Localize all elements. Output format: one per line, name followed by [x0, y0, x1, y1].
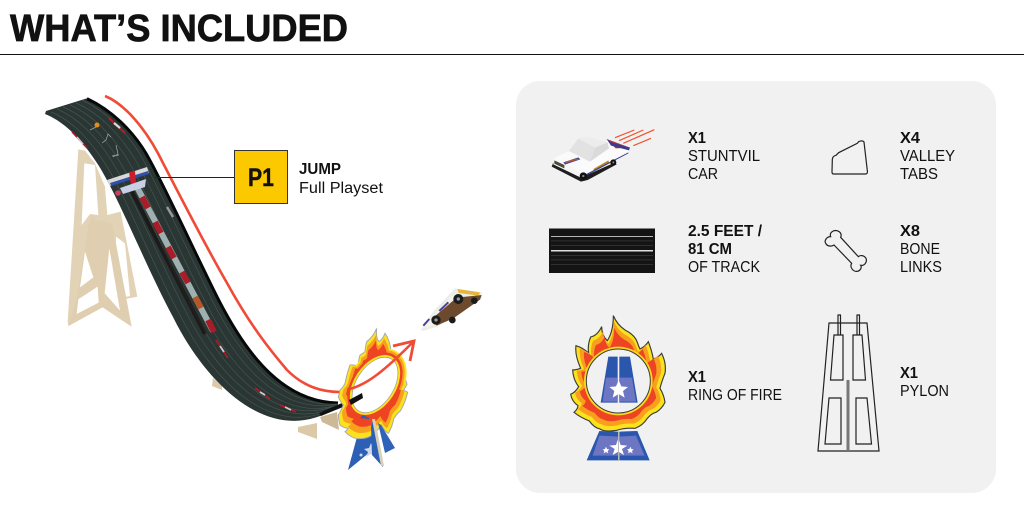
label: x1 ring of fire — [688, 369, 782, 404]
label: x4 valley tabs: TABS — [900, 166, 938, 183]
label: 2.5 feet of track — [688, 223, 763, 276]
label: x1 stuntvil car: CAR — [688, 166, 718, 183]
track decorations — [72, 118, 296, 412]
callout: P1 badge — [234, 150, 288, 204]
inner blue stand — [601, 357, 638, 403]
label: x1 stuntvil car — [688, 130, 760, 183]
icon: pylon outline — [818, 315, 879, 451]
lower blue base — [587, 431, 650, 461]
wooden pylon support — [68, 149, 137, 327]
callout connector line — [155, 177, 234, 178]
label: x8 bone links: BONE — [900, 241, 940, 258]
label: x4 valley tabs — [900, 130, 955, 183]
label: x8 bone links — [900, 223, 942, 276]
icon: track piece — [549, 228, 655, 273]
callout label: jump: JUMP — [299, 161, 341, 178]
icon: ring of fire — [571, 316, 665, 461]
icon: bone link — [825, 231, 866, 271]
label: x1 ring of fire: RING OF FIRE — [688, 387, 782, 404]
label: 2.5 feet of track: 2.5 FEET / — [688, 223, 763, 240]
label: x1 stuntvil car: X1 — [688, 130, 706, 147]
label: 2.5 feet of track: 81 CM — [688, 241, 732, 258]
title: WHAT’S INCLUDED — [10, 8, 348, 50]
icon: stuntvil car — [552, 130, 654, 182]
track end ramp — [319, 403, 343, 416]
callout label: jump: Full Playset — [299, 180, 384, 197]
callout: P1 badge: P1 — [248, 164, 274, 192]
label: x4 valley tabs: X4 — [900, 130, 920, 147]
label: x8 bone links: X8 — [900, 223, 920, 240]
label: x1 stuntvil car: STUNTVIL — [688, 148, 760, 165]
icon: blue stand front wing — [348, 415, 383, 470]
callout label: jump — [299, 161, 384, 197]
wooden valley tabs — [212, 378, 339, 439]
label: x1 pylon: PYLON — [900, 383, 949, 400]
label: x4 valley tabs: VALLEY — [900, 148, 955, 165]
icon: flame ring — [330, 328, 420, 439]
icon: flying car — [421, 288, 482, 331]
label: x1 pylon: X1 — [900, 365, 918, 382]
label: 2.5 feet of track: OF TRACK — [688, 259, 760, 276]
label: x1 ring of fire: X1 — [688, 369, 706, 386]
illustration: jump playset — [45, 96, 482, 470]
label: x1 pylon — [900, 365, 949, 400]
panel: included items — [516, 81, 996, 493]
flame ring — [571, 316, 665, 431]
icon: valley tab — [832, 141, 867, 174]
trajectory arc: red line — [105, 96, 345, 392]
ring-side ramp and arc passing through — [349, 341, 414, 419]
label: x8 bone links: LINKS — [900, 259, 942, 276]
racing track — [45, 98, 338, 421]
start gate banner — [107, 167, 149, 196]
icon: blue stand post and back wing — [371, 419, 395, 467]
